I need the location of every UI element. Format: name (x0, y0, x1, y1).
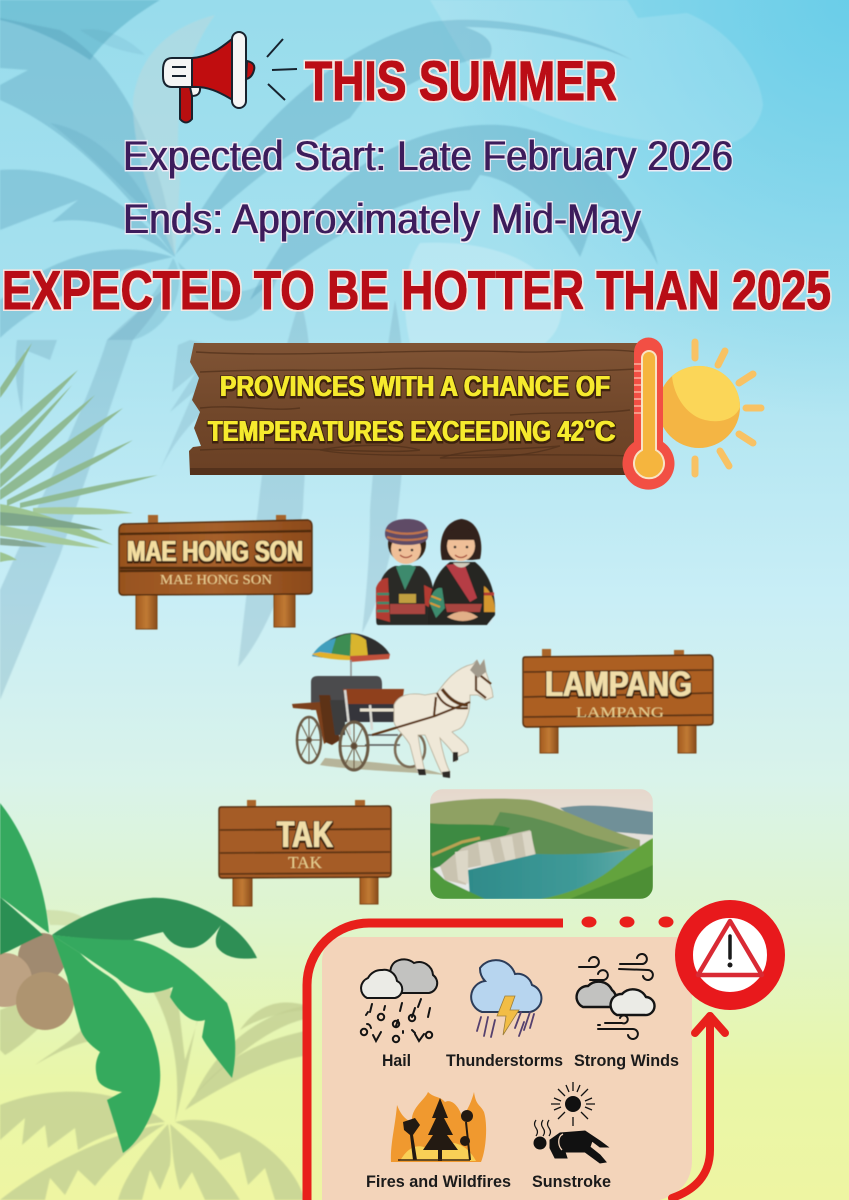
background palm silhouettes: sky (0, 0, 763, 700)
illustration: horse carriage with umbrella (292, 633, 493, 778)
icon: sunstroke (534, 1082, 608, 1163)
sign: Lampang (523, 649, 713, 753)
sign: Mae Hong Son (119, 515, 312, 629)
icon: megaphone (163, 32, 297, 122)
text: Thunderstorms label: Thunderstorms (446, 1051, 563, 1070)
text: Mae Hong Son name: MAE HONG SON (127, 536, 303, 568)
girl (428, 519, 495, 625)
text: Tak sub name: TAK (288, 853, 323, 872)
sign: Tak (219, 800, 391, 906)
icon: sun (658, 342, 761, 474)
red frame with dots (307, 916, 674, 1200)
text: Sunstroke label: Sunstroke (532, 1172, 611, 1191)
background corner tint (400, 0, 849, 420)
horse (372, 660, 493, 778)
text: Fires and Wildfires label: Fires and Wildfires (366, 1172, 511, 1191)
panel: hazards (307, 909, 776, 1200)
text: ends: Ends: Approximately Mid-May (123, 195, 641, 242)
icon: warning sign (684, 909, 776, 1001)
text: provinces line: PROVINCES WITH A CHANCE OF (220, 371, 610, 403)
illustration: two hill-tribe children (375, 519, 495, 625)
wheels (297, 717, 425, 770)
icon: wildfire (391, 1092, 486, 1162)
text: expected start: Expected Start: Late February 2026 (123, 132, 733, 179)
illustration: dam and reservoir (430, 789, 653, 899)
title row (163, 32, 617, 122)
shadow (320, 758, 445, 775)
text: Strong Winds label: Strong Winds (574, 1051, 679, 1070)
icon: thunderstorm (471, 960, 541, 1037)
text: Lampang name: LAMPANG (545, 665, 692, 704)
palm fronds: top-left slender leaves (0, 343, 158, 562)
carriage body (292, 676, 404, 745)
text: temperatures line: TEMPERATURES EXCEEDING 42 (208, 416, 584, 448)
background palm silhouettes: lower meadow (0, 910, 310, 1200)
umbrella (312, 633, 390, 692)
icon: strong winds (577, 954, 655, 1039)
icon: thermometer (623, 338, 674, 490)
banner: wooden plank (189, 343, 640, 475)
icon: hail (361, 959, 437, 1042)
boy (376, 519, 434, 625)
arrow up to warning (672, 1016, 725, 1198)
text: temperatures line: o (585, 415, 595, 432)
text: Lampang sub name: LAMPANG (576, 705, 664, 721)
green palm with coconuts (0, 803, 257, 1153)
text: Hail label: Hail (382, 1051, 411, 1070)
coconuts (0, 933, 74, 1030)
text: temperatures line: C (595, 416, 616, 448)
heading: THIS SUMMER: THIS SUMMER (305, 49, 617, 112)
text: Tak name: TAK (277, 814, 333, 855)
text: Mae Hong Son sub name: MAE HONG SON (160, 573, 272, 588)
